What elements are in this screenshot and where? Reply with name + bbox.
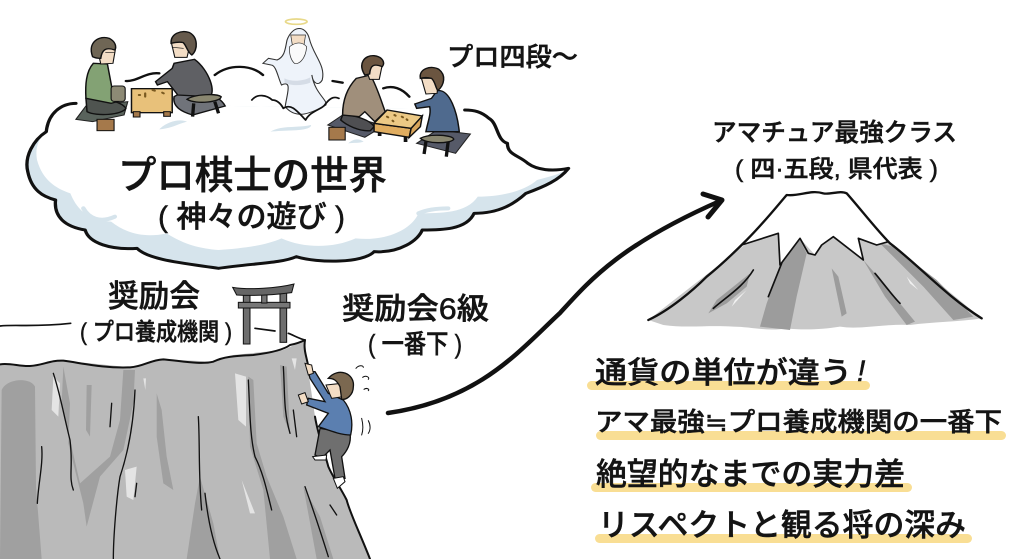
- label: strongest amateur class: アマチュア最強クラス: [712, 119, 957, 147]
- figure: player in blue jacket: [415, 67, 470, 157]
- illustration: mountain: [648, 192, 982, 330]
- cliff with shading: [0, 323, 370, 559]
- figure: player in dark kimono with glasses: [156, 32, 225, 117]
- takeaway line 1: 通貨の単位が違う: [595, 357, 852, 390]
- takeaway line 2: アマ最強≒プロ養成機関の一番下: [595, 407, 1002, 437]
- figure: god with halo: [252, 19, 339, 120]
- figure: player in green kimono: [76, 37, 128, 131]
- takeaway line 4: リスペクトと観る将の深み: [598, 508, 966, 543]
- label: lowest rank: ( 一番下 ): [368, 329, 462, 359]
- arrow: from climber to mountain: [388, 194, 722, 413]
- figure: shogi board right: [374, 110, 422, 142]
- label: pro 4-dan and above: プロ四段〜: [447, 42, 578, 72]
- subheading: play of the gods: ( 神々の遊び ): [158, 201, 345, 234]
- heading: world of professional shogi: プロ棋士の世界: [118, 155, 387, 198]
- label: shoreikai 6-kyu: 奨励会6級: [342, 293, 489, 326]
- label: shoreikai: 奨励会: [108, 279, 200, 314]
- takeaway line 3: 絶望的なまでの実力差: [596, 457, 905, 492]
- label: pro training institution: ( プロ養成機関 ): [80, 319, 232, 346]
- figure: climber on cliff: [298, 363, 370, 488]
- cloud: pro world: [27, 67, 569, 268]
- icon: torii gate: [233, 284, 294, 344]
- figure: shogi board left: [131, 89, 172, 117]
- takeaway line 1: !: [857, 355, 866, 388]
- highlight bars: [587, 381, 1006, 543]
- figure: player in brown kimono: [328, 56, 385, 140]
- label: 4-5 dan prefecture representative: ( 四·五段, 県代表 ): [735, 156, 938, 183]
